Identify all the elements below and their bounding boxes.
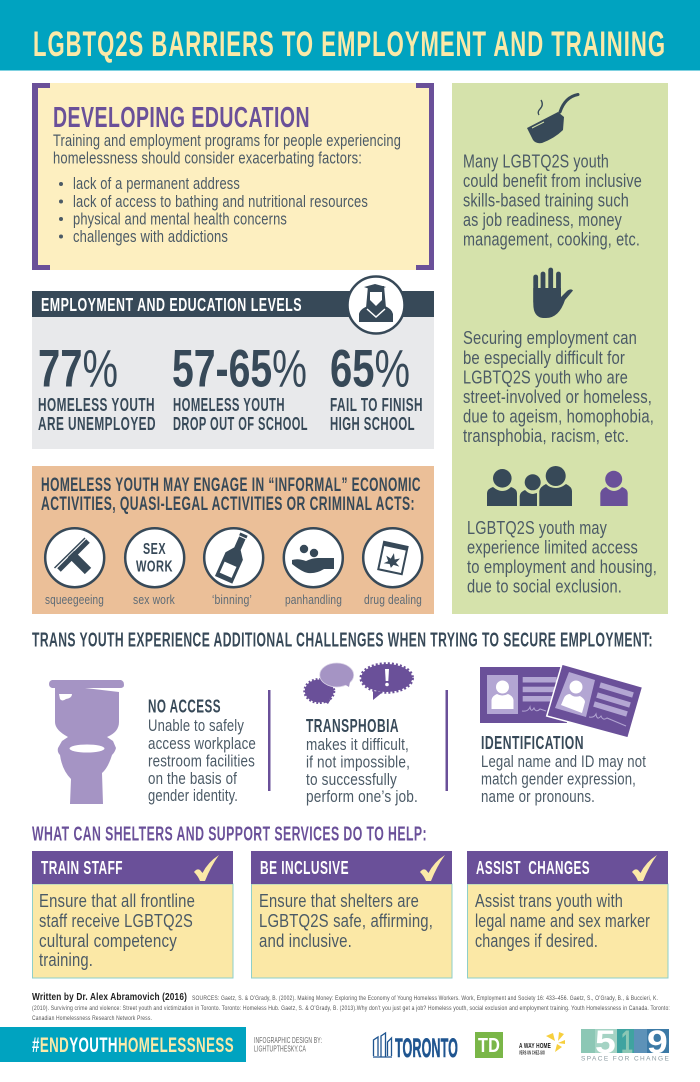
card text: and inclusive.: [259, 931, 352, 951]
stat: 57-65%: DROP OUT OF SCHOOL: [173, 414, 308, 434]
section: no access: [49, 680, 256, 805]
activity labels: [45, 592, 422, 607]
stat: 65%: HIGH SCHOOL: [330, 414, 415, 434]
icon: check mark: [194, 855, 219, 881]
logo: a way home: A WAY HOME: [519, 1043, 551, 1050]
card text: cultural competency: [39, 931, 177, 951]
icon: speech bubbles: [305, 663, 412, 704]
stat: 65%: [330, 340, 423, 434]
card text: legal name and sex marker: [475, 911, 650, 931]
stat: 57-65%: [172, 340, 308, 434]
card: assist changes: [467, 851, 668, 978]
icon: frying pan: [527, 94, 578, 143]
card text: Ensure that shelters are: [259, 891, 419, 911]
logo: toronto: [373, 1033, 458, 1063]
icon: panhandling: [284, 528, 343, 587]
icon: sex work: SEX: [143, 541, 166, 558]
text: securing employment: transphobia, racism, etc.: [463, 425, 629, 446]
stat: 77%: 77%: [38, 340, 118, 399]
bullet list: challenges with addictions: [73, 228, 228, 246]
right bracket: [416, 83, 434, 270]
stat: 65%: FAIL TO FINISH: [330, 395, 423, 415]
text: skills training: [463, 150, 642, 250]
text: skills training: could benefit from inclusive: [463, 170, 642, 191]
description: makes it difficult,: [306, 735, 409, 754]
icon: raised hand: [533, 270, 573, 318]
section: identification: [480, 664, 646, 806]
card text: [475, 891, 650, 951]
logo: the 519: 5: [595, 1024, 616, 1060]
icon: squeegee: [45, 528, 104, 587]
description: [306, 735, 418, 806]
stat: 77%: [38, 340, 156, 434]
text: social exclusion: to employment and housing,: [467, 556, 657, 577]
logo: td: TD: [478, 1035, 500, 1057]
panel: developing education: [32, 83, 434, 270]
label: IDENTIFICATION: [481, 733, 584, 753]
text: skills training: as job readiness, money: [463, 209, 622, 230]
bullet list: [59, 175, 368, 246]
heading: DEVELOPING EDUCATION: [53, 102, 310, 134]
description: gender identity.: [148, 786, 238, 805]
description: Unable to safely: [148, 716, 244, 735]
activity labels: sex work: [133, 592, 175, 607]
intro text: homelessness should consider exacerbating factors:: [53, 150, 362, 168]
icon: lone purple person: [600, 471, 628, 506]
card: be inclusive: [251, 851, 452, 978]
activity labels: squeegeeing: [45, 592, 104, 607]
card title: TRAIN STAFF: [41, 858, 123, 878]
heading: ACTIVITIES, QUASI-LEGAL ACTIVITIES OR CRIMINAL ACTS:: [41, 494, 415, 515]
footer hashtag banner: [0, 1027, 246, 1062]
panel: informal economic activities: [32, 466, 434, 614]
footer hashtag banner: #ENDYOUTHHOMELESSNESS: [32, 1034, 234, 1057]
stat: 77%: ARE UNEMPLOYED: [38, 414, 156, 434]
logo: a way home: [519, 1032, 565, 1056]
credits and sources: [32, 991, 670, 1022]
section: transphobia: [305, 663, 418, 806]
text: social exclusion: experience limited access: [467, 536, 638, 558]
heading: [41, 475, 421, 515]
card text: Assist trans youth with: [475, 891, 623, 911]
card text: training.: [39, 950, 93, 970]
text: securing employment: be especially difficult for: [463, 347, 625, 368]
logo: the 519: [581, 1024, 669, 1063]
description: perform one’s job.: [306, 787, 418, 806]
header banner: [0, 0, 700, 71]
text: securing employment: Securing employment can: [463, 327, 637, 348]
card text: Ensure that all frontline: [39, 891, 195, 911]
heading: EMPLOYMENT AND EDUCATION LEVELS: [41, 295, 302, 315]
card text: LGBTQ2S safe, affirming,: [259, 911, 433, 931]
intro text: [53, 132, 401, 168]
text: social exclusion: LGBTQ2S youth may: [467, 517, 607, 538]
logo: the 519: SPACE FOR CHANGE: [581, 1056, 669, 1063]
heading: what can shelters do: WHAT CAN SHELTERS AND SUPPORT SERVICES DO TO HELP:: [32, 824, 427, 846]
credits and sources: Written by Dr. Alex Abramovich (2016): [32, 991, 187, 1003]
bullet list: physical and mental health concerns: [73, 210, 287, 228]
logo: a way home: VERS UN CHEZ-SOI: [519, 1050, 545, 1056]
text: securing employment: due to ageism, homophobia,: [463, 406, 654, 426]
icon: bottle: [204, 528, 263, 587]
text: skills training: management, cooking, etc.: [463, 228, 640, 250]
text: social exclusion: [467, 517, 657, 596]
logo: the 519: 1: [621, 1024, 633, 1060]
logo: the 519: 9: [647, 1024, 668, 1060]
stat: 57-65%: 57-65%: [172, 340, 307, 399]
text: securing employment: street-involved or homeless,: [463, 386, 652, 407]
text: skills training: skills-based training such: [463, 190, 629, 210]
description: on the basis of: [148, 769, 237, 788]
icon: graduate: [348, 276, 404, 334]
design credit: LIGHTUPTHESKY.CA: [254, 1044, 306, 1054]
card text: [259, 891, 433, 951]
activity labels: drug dealing: [364, 592, 422, 607]
icon: check mark: [632, 855, 657, 881]
description: [148, 716, 256, 805]
card: train staff: [32, 851, 233, 978]
icon: sex work: WORK: [136, 559, 173, 576]
text: skills training: Many LGBTQ2S youth: [463, 150, 609, 172]
card text: staff receive LGBTQ2S: [39, 911, 193, 931]
left bracket: [32, 83, 50, 270]
description: name or pronouns.: [481, 787, 595, 806]
icon: check mark: [420, 855, 445, 881]
label: NO ACCESS: [148, 697, 221, 717]
description: access workplace: [148, 734, 256, 753]
description: if not impossible,: [306, 752, 410, 772]
bullet list: lack of a permanent address: [73, 175, 240, 193]
label: TRANSPHOBIA: [306, 716, 399, 736]
heading: HOMELESS YOUTH MAY ENGAGE IN “INFORMAL” ECONOMIC: [41, 475, 421, 496]
description: Legal name and ID may not: [481, 752, 646, 771]
design credit: [254, 1036, 322, 1054]
description: [481, 752, 646, 806]
card text: changes if desired.: [475, 931, 598, 951]
credits and sources: Canadian Homelessness Research Network Press.: [32, 1015, 152, 1022]
design credit: INFOGRAPHIC DESIGN BY:: [254, 1036, 322, 1045]
icon: drug bag: [363, 528, 422, 587]
panel: employment and education levels: [32, 276, 434, 449]
stat: 65%: 65%: [330, 340, 410, 399]
activity labels: panhandling: [285, 592, 342, 607]
icon: id cards: [480, 664, 643, 738]
description: restroom facilities: [148, 752, 255, 770]
bullet list: lack of access to bathing and nutritional resources: [73, 193, 368, 211]
text: securing employment: [463, 327, 654, 446]
card text: [39, 891, 195, 970]
icon: group of people: [487, 466, 572, 506]
description: to successfully: [306, 770, 397, 789]
stat: 77%: HOMELESS YOUTH: [38, 395, 155, 415]
stat: 57-65%: HOMELESS YOUTH: [173, 395, 285, 415]
card title: ASSIST CHANGES: [476, 858, 590, 878]
icon: sex work: [125, 528, 184, 587]
description: match gender expression,: [481, 770, 636, 788]
activity labels: ‘binning’: [212, 592, 252, 607]
text: securing employment: LGBTQ2S youth who are: [463, 366, 628, 388]
panel: green sidebar: [452, 83, 668, 614]
icon: toilet: [49, 680, 124, 804]
text: social exclusion: due to social exclusion.: [467, 576, 622, 596]
intro text: Training and employment programs for people experiencing: [53, 132, 401, 150]
text: TORONTO: [395, 1033, 458, 1063]
card title: BE INCLUSIVE: [260, 858, 349, 878]
